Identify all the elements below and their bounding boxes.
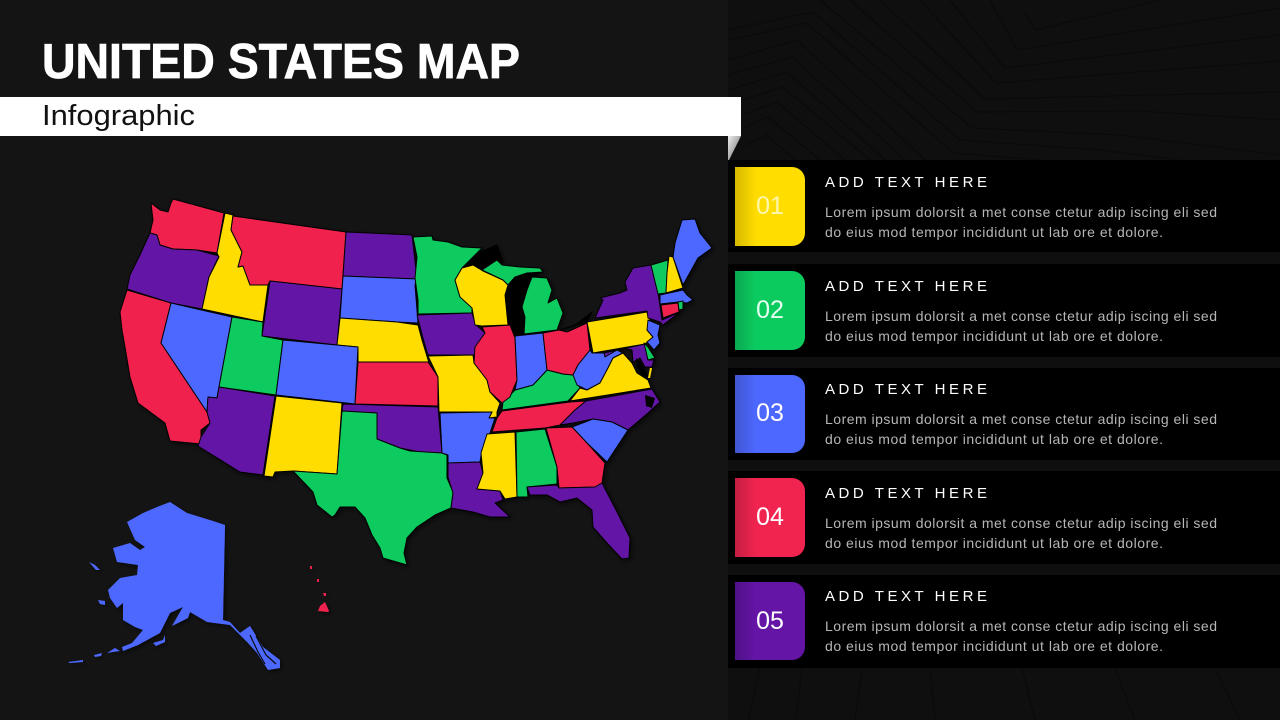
badge 03 bbox=[735, 375, 805, 453]
New Jersey bbox=[647, 320, 660, 350]
New Mexico bbox=[264, 396, 342, 477]
Arizona bbox=[198, 387, 275, 475]
Maryland bbox=[604, 344, 654, 367]
number 02: 02 bbox=[756, 296, 784, 324]
body 05: do eius mod tempor incididunt ut lab ore et dolore. bbox=[825, 638, 1163, 654]
Connecticut bbox=[661, 303, 679, 318]
Colorado bbox=[276, 340, 358, 404]
number 03: 03 bbox=[756, 399, 784, 427]
Michigan bbox=[482, 260, 563, 334]
Kentucky bbox=[502, 370, 580, 410]
subtitle band: Infographic bbox=[42, 100, 195, 132]
Rhode Island bbox=[678, 301, 683, 310]
body 04: do eius mod tempor incididunt ut lab ore et dolore. bbox=[825, 535, 1163, 551]
Louisiana bbox=[448, 462, 510, 517]
Georgia bbox=[546, 427, 605, 488]
number 01: 01 bbox=[756, 192, 784, 220]
New York bbox=[595, 265, 680, 325]
Ohio bbox=[543, 323, 590, 375]
South Dakota bbox=[340, 276, 418, 323]
Indiana bbox=[515, 333, 547, 390]
Iowa bbox=[417, 313, 485, 355]
panel: item 04 bbox=[728, 471, 1280, 564]
New Hampshire bbox=[666, 256, 683, 293]
panel: item 01 bbox=[728, 160, 1280, 252]
badge 02 bbox=[735, 271, 805, 350]
Virginia bbox=[570, 353, 651, 401]
map of the United States bbox=[68, 199, 712, 670]
Hawaii bbox=[310, 566, 329, 612]
Nebraska bbox=[337, 318, 429, 363]
Montana bbox=[231, 216, 346, 289]
body 04: Lorem ipsum dolorsit a met conse ctetur adip iscing eli sed bbox=[825, 515, 1217, 531]
body 02: Lorem ipsum dolorsit a met conse ctetur adip iscing eli sed bbox=[825, 308, 1217, 324]
Chesapeake and sounds bbox=[636, 358, 655, 408]
Massachusetts bbox=[660, 290, 693, 304]
California bbox=[120, 290, 210, 444]
badge 01 bbox=[735, 167, 805, 246]
heading 02: ADD TEXT HERE bbox=[825, 278, 987, 295]
panel: item 02 bbox=[728, 264, 1280, 357]
Utah bbox=[219, 317, 283, 395]
Texas bbox=[293, 411, 453, 565]
badge 04 bbox=[735, 478, 805, 557]
heading 01: ADD TEXT HERE bbox=[825, 174, 987, 191]
Illinois bbox=[474, 325, 517, 403]
badge 05 bbox=[735, 582, 805, 660]
panel: item 03 bbox=[728, 368, 1280, 460]
Wyoming bbox=[262, 281, 342, 345]
Maine bbox=[673, 219, 712, 285]
body 01: do eius mod tempor incididunt ut lab ore et dolore. bbox=[825, 224, 1163, 240]
Alaska bbox=[68, 502, 280, 670]
title: UNITED STATES MAP bbox=[42, 35, 520, 89]
North Carolina bbox=[560, 389, 660, 430]
Oklahoma bbox=[342, 404, 442, 453]
South Carolina bbox=[572, 419, 628, 462]
Idaho bbox=[202, 213, 268, 322]
Florida bbox=[527, 483, 630, 559]
North Dakota bbox=[343, 232, 417, 279]
body 05: Lorem ipsum dolorsit a met conse ctetur adip iscing eli sed bbox=[825, 618, 1217, 634]
number 05: 05 bbox=[756, 607, 784, 635]
heading 04: ADD TEXT HERE bbox=[825, 485, 987, 502]
Delaware bbox=[644, 343, 655, 360]
panel: item 05 bbox=[728, 575, 1280, 668]
Tennessee bbox=[492, 401, 586, 432]
Mississippi bbox=[477, 432, 517, 499]
Oregon bbox=[127, 233, 219, 309]
Great Lakes bbox=[462, 245, 592, 336]
body 03: Lorem ipsum dolorsit a met conse ctetur adip iscing eli sed bbox=[825, 411, 1217, 427]
heading 05: ADD TEXT HERE bbox=[825, 588, 987, 605]
Kansas bbox=[355, 362, 438, 406]
Alabama bbox=[516, 429, 557, 497]
Pennsylvania bbox=[587, 312, 653, 353]
West Virginia bbox=[573, 350, 623, 390]
body 03: do eius mod tempor incididunt ut lab ore et dolore. bbox=[825, 431, 1163, 447]
Vermont bbox=[651, 260, 668, 294]
Wisconsin bbox=[455, 265, 508, 326]
heading 03: ADD TEXT HERE bbox=[825, 381, 987, 398]
Washington bbox=[150, 199, 224, 253]
Nevada bbox=[161, 303, 232, 412]
Missouri bbox=[428, 355, 500, 418]
subtitle band bbox=[0, 97, 741, 162]
body 02: do eius mod tempor incididunt ut lab ore et dolore. bbox=[825, 328, 1163, 344]
number 04: 04 bbox=[756, 503, 784, 531]
body 01: Lorem ipsum dolorsit a met conse ctetur adip iscing eli sed bbox=[825, 204, 1217, 220]
Minnesota bbox=[413, 236, 482, 314]
Arkansas bbox=[440, 412, 495, 463]
